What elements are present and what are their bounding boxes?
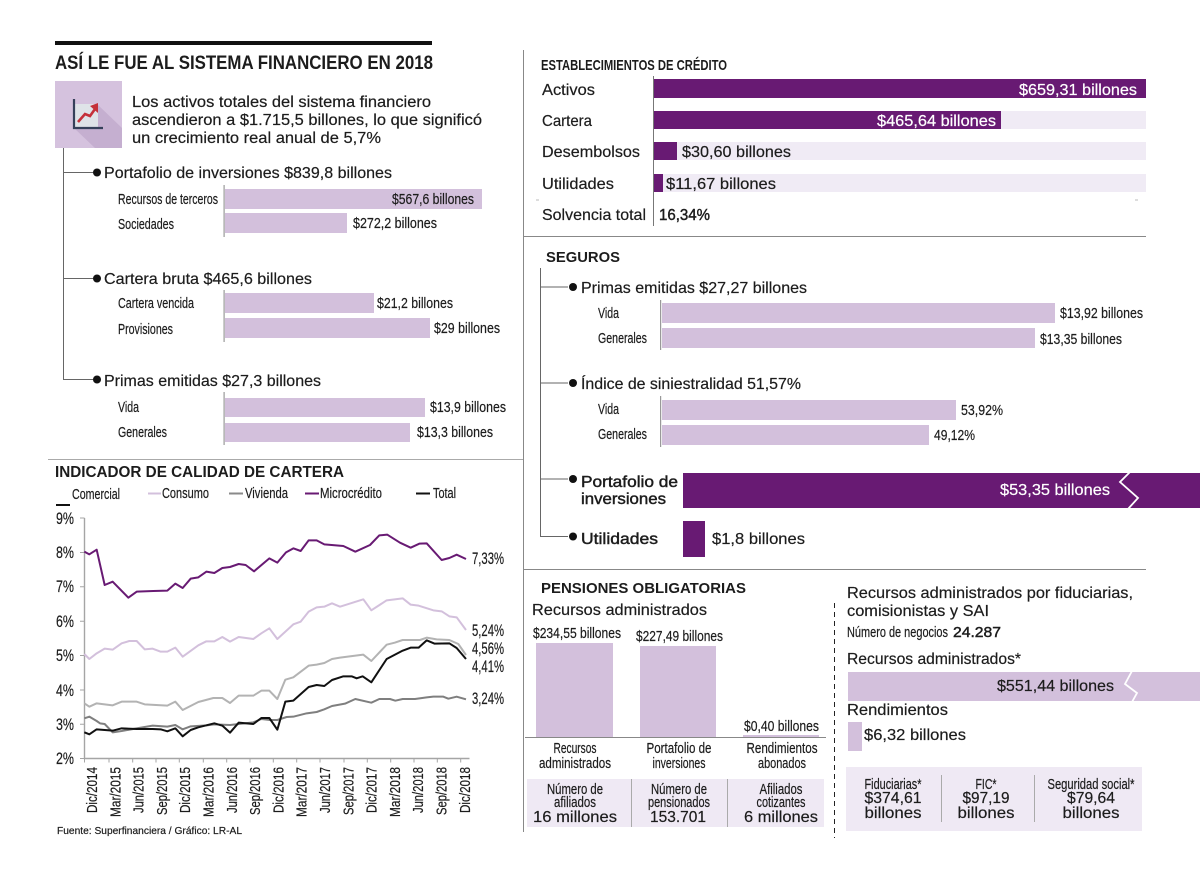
bar: generales: $13,3 billones: [417, 424, 493, 441]
column chart: Rendimientos: [746, 740, 818, 757]
x axis labels: Sep/2018: [434, 767, 450, 815]
panel: seguros: [540, 249, 1200, 557]
legend: Total: [433, 485, 456, 502]
line chart: [56, 509, 504, 817]
stats box: $79,64: [1067, 790, 1115, 807]
stats box: 16 millones: [533, 809, 617, 826]
group: cartera bruta: Cartera bruta $465,6 billones: [104, 271, 312, 288]
bar: rendimientos: Rendimientos: [847, 702, 948, 719]
bar: recursos administrados: Recursos administrados*: [847, 651, 1021, 668]
legend: [56, 485, 456, 506]
bar: cartera: Cartera: [542, 113, 592, 130]
x axis labels: Dic/2018: [458, 767, 474, 813]
bar: activos: [542, 79, 1146, 99]
end value labels: 3,24%: [472, 689, 504, 708]
panel: recursos administrados por fiduciarias: comisionistas y SAI: [847, 603, 989, 620]
x axis labels: Sep/2016: [248, 767, 264, 815]
bar: recursos administrados: $551,44 billones: [997, 678, 1114, 695]
source note: Fuente: Superfinanciera / Gráfico: LR-AL: [57, 825, 242, 837]
bar: desembolsos: $30,60 billones: [682, 144, 791, 161]
y axis labels: 7%: [56, 577, 74, 596]
stats box: pensionados: [648, 794, 710, 811]
group: portafolio de inversiones: Portafolio de inversiones $839,8 billones: [104, 165, 392, 182]
group: utilidades: $1,8 billones: [712, 531, 805, 548]
bar: provisiones: $29 billones: [434, 320, 500, 337]
bar: vida: $13,9 billones: [430, 399, 506, 416]
column chart: [525, 625, 826, 772]
group: portafolio de inversiones: $53,35 billones: [1000, 482, 1110, 499]
bar: recursos de terceros: [118, 189, 482, 209]
stats box: [527, 779, 824, 827]
heading: INDICADOR DE CALIDAD DE CARTERA: [55, 464, 344, 481]
legend: Microcrédito: [320, 485, 382, 502]
x axis labels: Dic/2017: [365, 767, 381, 813]
bar: generales: Generales: [598, 426, 647, 443]
bar: utilidades: Utilidades: [542, 176, 614, 193]
x axis labels: Jun/2018: [411, 767, 427, 813]
bar: cartera vencida: [118, 293, 453, 313]
title: ASÍ LE FUE AL SISTEMA FINANCIERO EN 2018: [55, 51, 433, 74]
bar: vida: [118, 398, 506, 417]
x axis labels: Dic/2014: [85, 767, 101, 813]
panel: pensiones obligatorias: Recursos administrados: [532, 602, 707, 619]
bar: vida: Vida: [118, 399, 139, 416]
group: utilidades: [569, 521, 805, 557]
bar: cartera vencida: $21,2 billones: [377, 295, 453, 312]
y axis labels: 8%: [56, 543, 74, 562]
y axis labels: 3%: [56, 715, 74, 734]
número de negocios: 24.287: [953, 624, 1001, 641]
group: portafolio de inversiones: inversiones: [581, 491, 666, 508]
bar: generales: [598, 328, 1122, 348]
bar: sociedades: [118, 213, 437, 233]
intro text: un crecimiento real anual de 5,7%: [132, 130, 381, 147]
bar: cartera vencida: Cartera vencida: [118, 295, 194, 312]
x axis labels: Sep/2015: [155, 767, 171, 815]
stats box: Afiliados: [760, 781, 802, 798]
bar: vida: Vida: [598, 401, 619, 418]
stats box: billones: [958, 805, 1014, 822]
stats box: cotizantes: [756, 794, 806, 811]
bar: utilidades: $11,67 billones: [666, 176, 776, 193]
x axis labels: Dic/2016: [271, 767, 287, 813]
bar: provisiones: [118, 318, 500, 338]
stats box: [846, 767, 1142, 831]
x axis labels: Mar/2018: [388, 767, 404, 817]
legend: Comercial: [72, 486, 120, 503]
group: utilidades: Utilidades: [581, 531, 658, 548]
group: primas emitidas: Primas emitidas $27,27 billones: [581, 280, 807, 297]
legend: Consumo: [162, 485, 209, 502]
stats box: Seguridad social*: [1048, 776, 1135, 793]
group: primas emitidas: [93, 373, 506, 445]
bar: vida: [598, 400, 1003, 420]
bar: sociedades: $272,2 billones: [353, 215, 437, 232]
group: portafolio de inversiones: [93, 165, 482, 237]
bar: recursos de terceros: $567,6 billones: [392, 191, 474, 208]
bar: vida: Vida: [598, 305, 619, 322]
bar: sociedades: Sociedades: [118, 216, 174, 233]
bar: desembolsos: [542, 142, 1146, 161]
bar: generales: $13,35 billones: [1040, 331, 1122, 348]
column chart: Portafolio de: [646, 740, 712, 757]
bar: cartera: $465,64 billones: [877, 113, 996, 130]
solvencia total: [542, 207, 710, 224]
x axis labels: Jun/2015: [132, 767, 148, 813]
stats box: $374,61: [864, 790, 922, 807]
panel: seguros: SEGUROS: [546, 249, 620, 266]
bar: rendimientos: [847, 702, 966, 751]
panel: recursos administrados por fiduciarias: [846, 585, 1200, 831]
bar: generales: [118, 423, 493, 442]
número de negocios: Número de negocios: [847, 624, 948, 641]
stats box: $97,19: [962, 790, 1010, 807]
intro text: ascendieron a $1.715,5 billones, lo que significó: [132, 112, 482, 129]
panel: pensiones obligatorias: [525, 580, 826, 827]
stats box: Número de: [651, 781, 707, 798]
panel: establecimientos de crédito: [536, 57, 1146, 226]
bar: recursos de terceros: Recursos de terceros: [118, 191, 218, 208]
x axis labels: Mar/2017: [295, 767, 311, 817]
x axis labels: Jun/2016: [225, 767, 241, 813]
bar: vida: $13,92 billones: [1060, 305, 1143, 322]
x axis labels: Jun/2017: [318, 767, 334, 813]
bar: desembolsos: Desembolsos: [542, 144, 640, 161]
bar: generales: Generales: [598, 330, 647, 347]
column chart: $234,55 billones: [533, 625, 621, 642]
y axis labels: 5%: [56, 646, 74, 665]
bar: generales: Generales: [118, 424, 167, 441]
column chart: abonados: [758, 755, 806, 772]
bar: recursos administrados: [847, 651, 1200, 702]
intro text: Los activos totales del sistema financiero: [132, 94, 431, 111]
bar: vida: 53,92%: [961, 402, 1003, 419]
end value labels: [472, 549, 504, 708]
stats box: 6 millones: [744, 809, 818, 826]
panel: indicador de calidad de cartera: [55, 464, 504, 837]
group: índice de siniestralidad: [569, 374, 1003, 447]
group: índice de siniestralidad: Índice de siniestralidad 51,57%: [581, 374, 801, 393]
bar: provisiones: Provisiones: [118, 321, 173, 338]
stats box: 153.701: [650, 809, 706, 826]
x axis labels: Dic/2015: [178, 767, 194, 813]
y axis labels: 2%: [56, 749, 74, 768]
panel: pensiones obligatorias: PENSIONES OBLIGATORIAS: [541, 580, 746, 597]
bar: activos: Activos: [542, 82, 595, 99]
x axis labels: Mar/2015: [108, 767, 124, 817]
stats box: Número de: [547, 781, 603, 798]
x axis labels: [85, 767, 474, 817]
end value labels: 4,56%: [472, 639, 504, 658]
column chart: $0,40 billones: [744, 718, 819, 735]
bar: vida: [598, 303, 1143, 323]
panel: left summary: [55, 41, 506, 445]
stats box: FIC*: [976, 776, 997, 793]
bar: utilidades: [542, 174, 1146, 193]
stats box: billones: [1062, 805, 1120, 822]
column chart: $227,49 billones: [636, 628, 723, 645]
column chart: Recursos: [554, 740, 596, 757]
y axis labels: 9%: [56, 509, 74, 528]
group: primas emitidas: Primas emitidas $27,3 billones: [104, 373, 321, 390]
bar: generales: 49,12%: [934, 427, 975, 444]
column chart: inversiones: [652, 755, 706, 772]
column chart: administrados: [539, 755, 611, 772]
solvencia total: Solvencia total: [542, 207, 646, 224]
stats box: Fiduciarias*: [864, 776, 922, 793]
bar: activos: $659,31 billones: [1019, 82, 1137, 99]
end value labels: 7,33%: [472, 549, 504, 568]
intro text: [132, 94, 482, 147]
end value labels: 5,24%: [472, 621, 504, 640]
icon: rising chart: [55, 81, 122, 148]
end value labels: 4,41%: [472, 657, 504, 676]
data series: [84, 535, 466, 736]
group: portafolio de inversiones: Portafolio de: [581, 474, 678, 491]
stats box: billones: [864, 805, 922, 822]
stats box: afiliados: [554, 794, 596, 811]
y axis labels: [56, 509, 74, 768]
bar: rendimientos: $6,32 billones: [864, 727, 966, 744]
x axis labels: Sep/2017: [341, 767, 357, 815]
bar: cartera: [542, 111, 1146, 130]
group: cartera bruta: [93, 271, 500, 342]
group: primas emitidas: [569, 280, 1143, 350]
legend: Vivienda: [245, 485, 288, 502]
y axis labels: 4%: [56, 681, 74, 700]
group: portafolio de inversiones: [569, 472, 1200, 509]
panel: establecimientos de crédito: ESTABLECIMIENTOS DE CRÉDITO: [541, 57, 727, 74]
solvencia total: 16,34%: [659, 207, 710, 224]
bar: generales: [598, 425, 975, 445]
y axis labels: 6%: [56, 612, 74, 631]
panel: recursos administrados por fiduciarias: Recursos administrados por fiduciarias,: [847, 585, 1133, 602]
x axis labels: Mar/2016: [202, 767, 218, 817]
